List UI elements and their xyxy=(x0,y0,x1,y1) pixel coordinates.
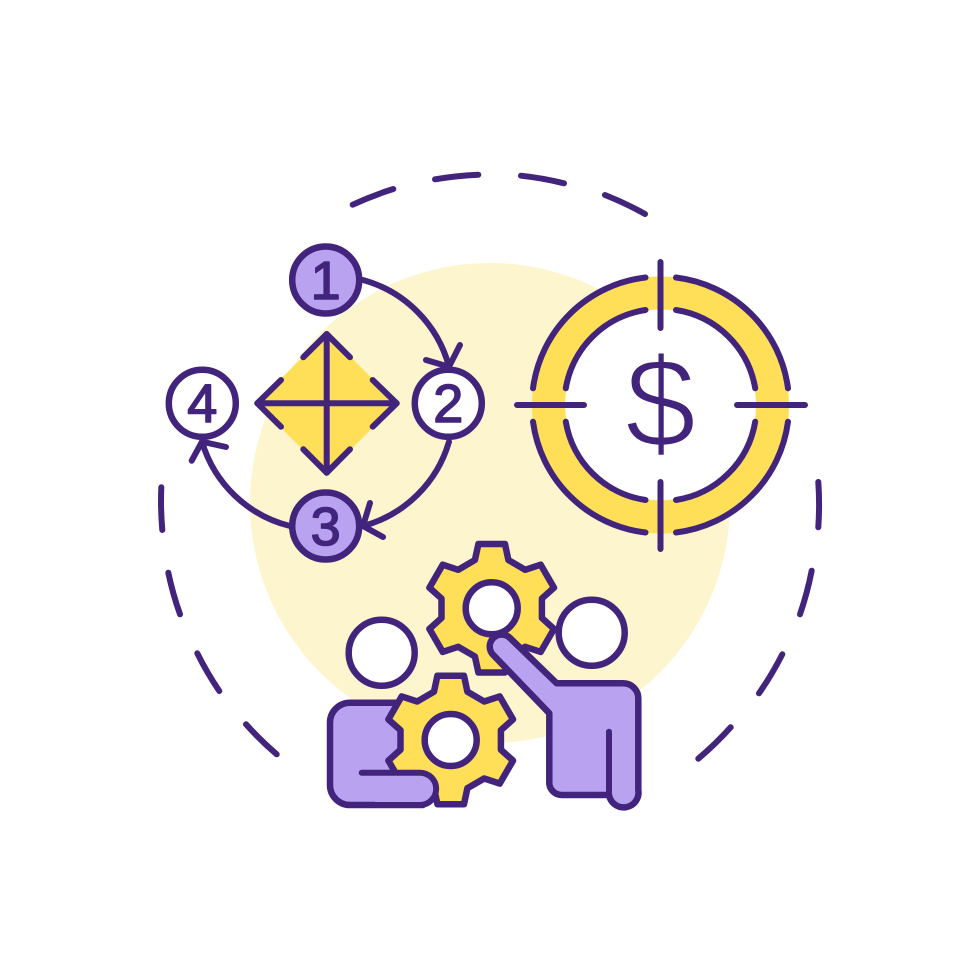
left person xyxy=(330,620,423,805)
arrow: step 3 to step 4 xyxy=(192,442,290,526)
dollar sign: $ xyxy=(625,332,696,475)
icon: diamond with four arrows xyxy=(256,333,397,474)
gear lower xyxy=(388,676,513,804)
step 1 xyxy=(292,246,359,314)
gear upper xyxy=(429,544,554,672)
right person head xyxy=(559,600,625,666)
left person arm xyxy=(360,773,436,805)
step 4: 4 xyxy=(187,374,217,434)
step 4 xyxy=(169,370,236,437)
step 3 xyxy=(292,492,359,560)
step 3: 3 xyxy=(311,497,341,557)
panel: process cycle xyxy=(169,246,482,560)
dashed outer ring xyxy=(161,175,819,759)
panel: team with gears xyxy=(330,544,639,807)
step 2: 2 xyxy=(433,374,463,434)
arrow: step 2 to step 3 xyxy=(363,442,449,537)
step 2 xyxy=(415,370,482,437)
background circle xyxy=(250,263,730,743)
right person body xyxy=(490,635,639,807)
arrow: step 1 to step 2 xyxy=(363,280,460,367)
step 1: 1 xyxy=(311,251,341,311)
right person arm line xyxy=(606,732,612,793)
icon: dollar target xyxy=(517,262,805,549)
